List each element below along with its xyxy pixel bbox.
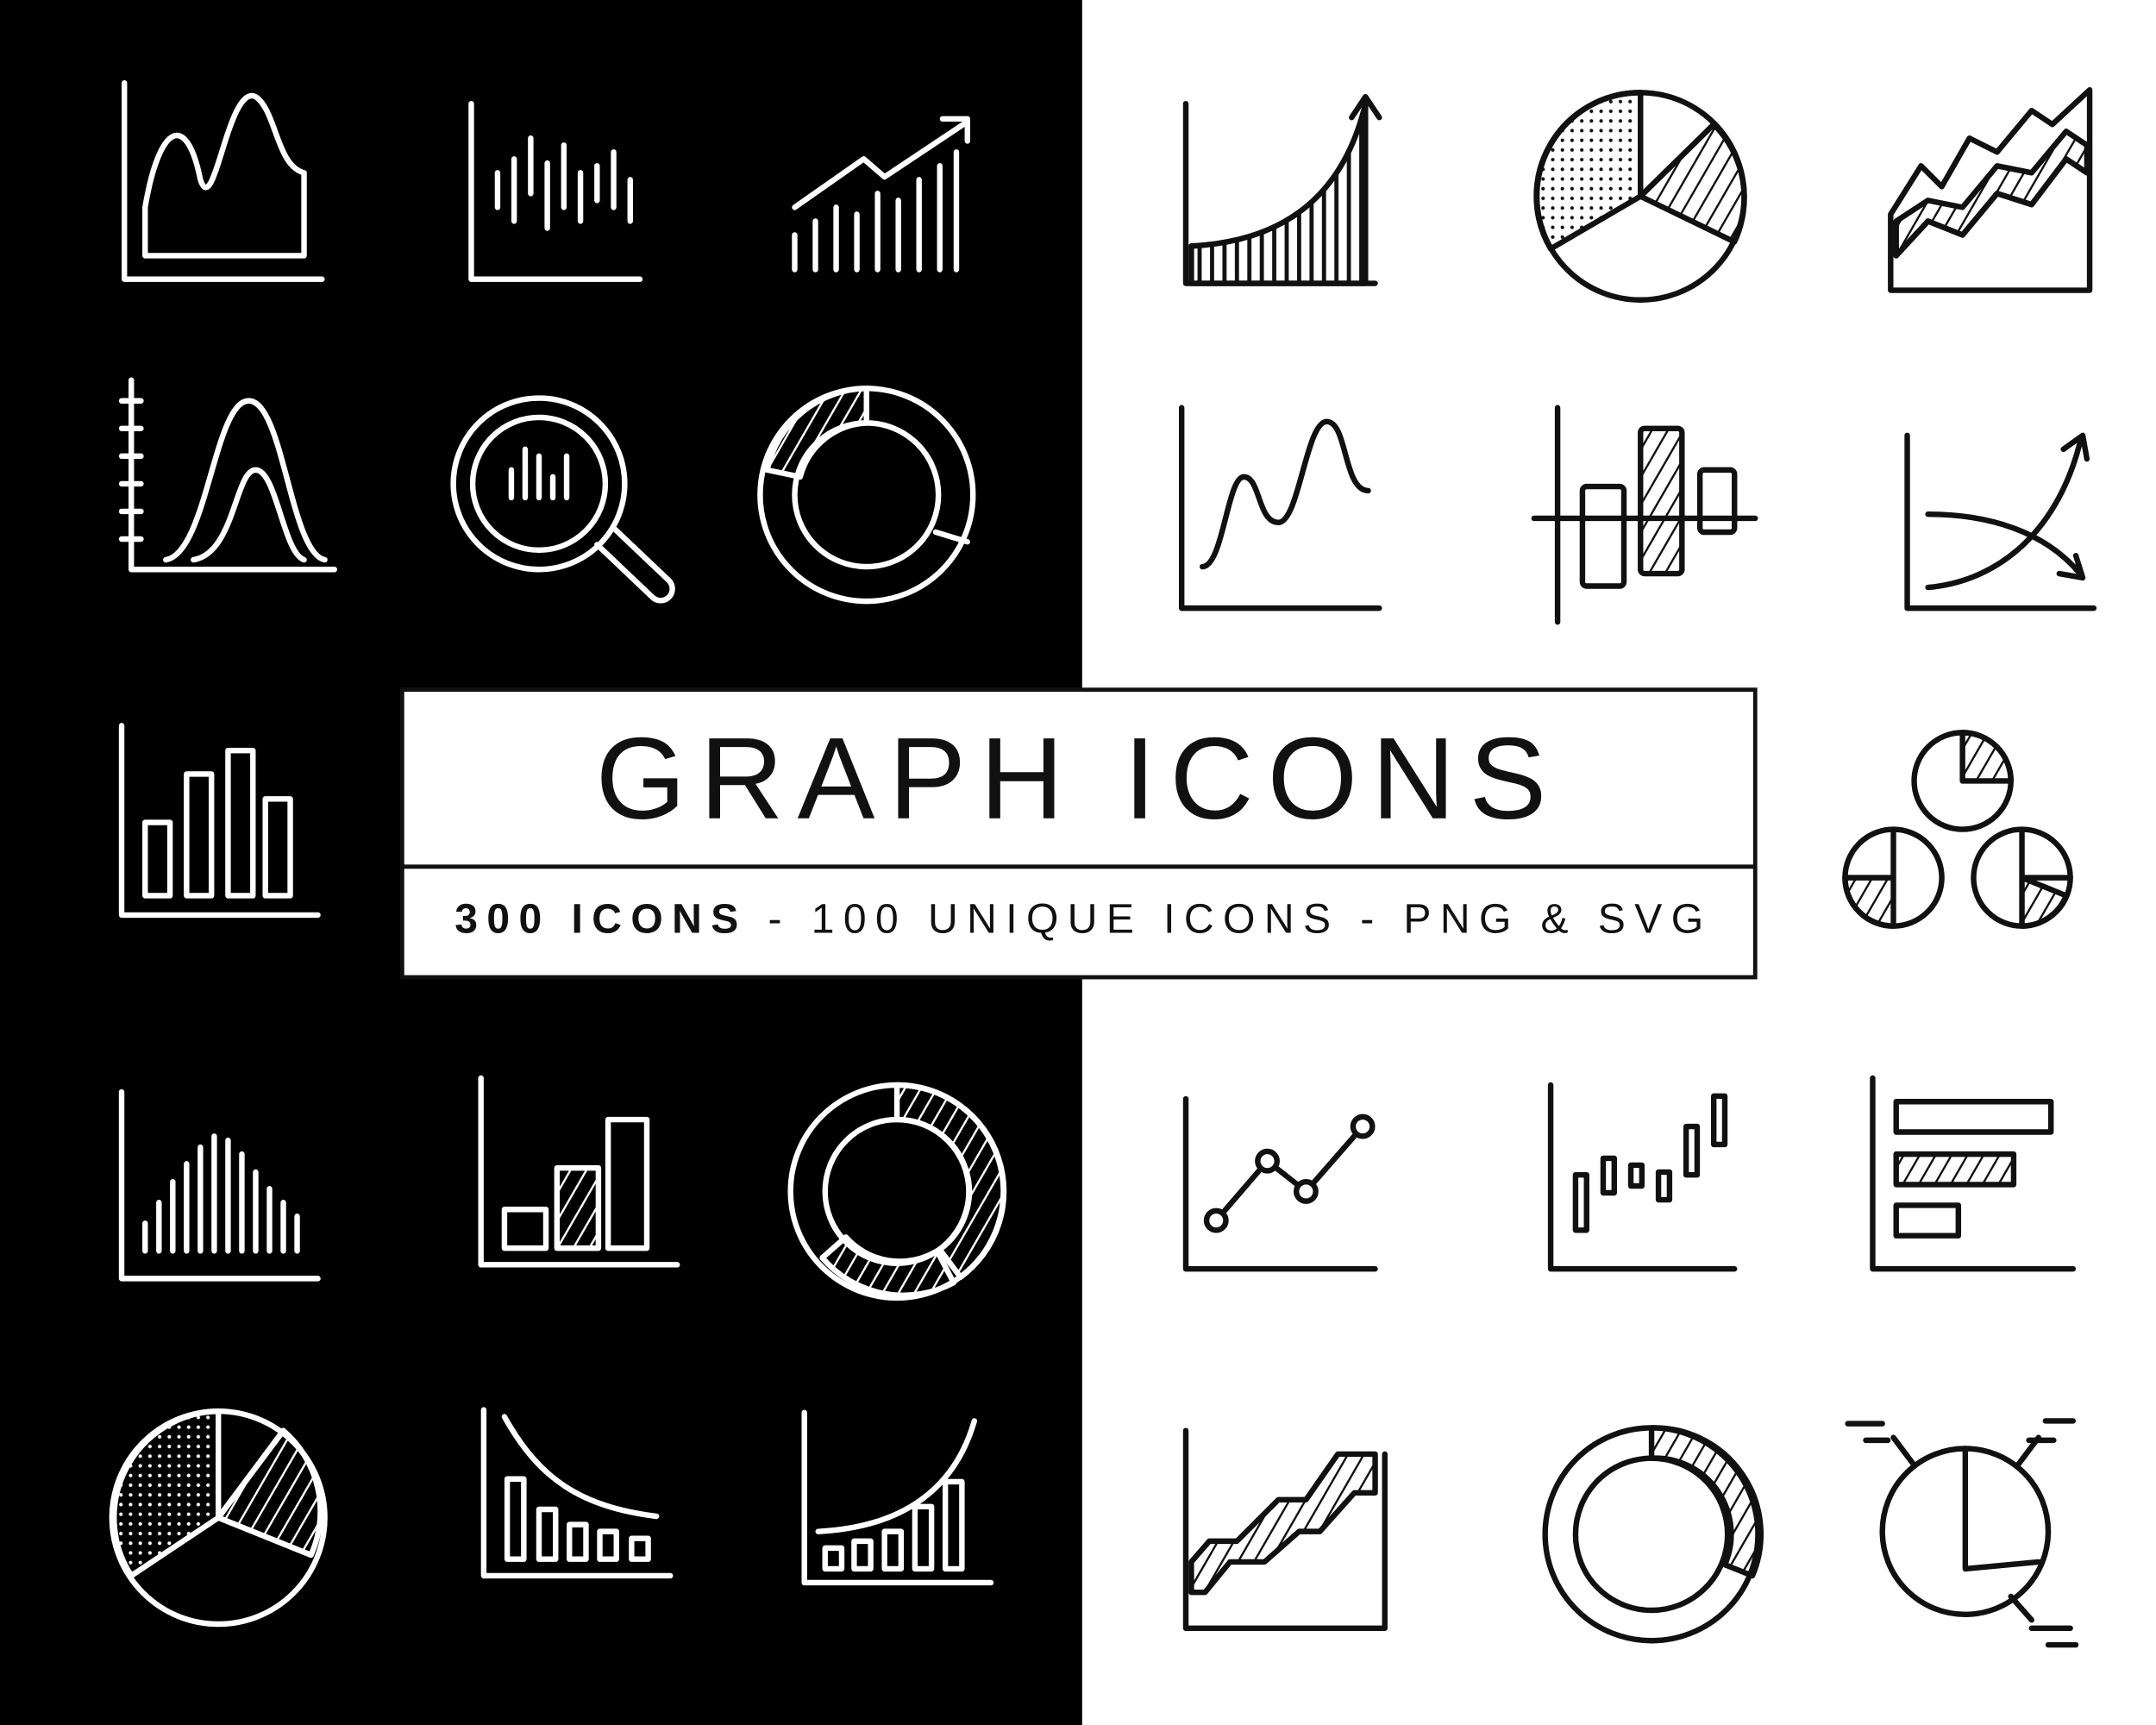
icon: bar chart outlined xyxy=(122,725,318,915)
icon: exponential hatched curve xyxy=(1186,97,1379,284)
icon: increasing bars curve xyxy=(805,1413,991,1583)
icon: bar chart hatched xyxy=(481,1078,677,1264)
icon: pie chart dots hatch xyxy=(1537,92,1745,300)
icon: vertical bar ticks xyxy=(471,104,640,279)
icon: pie chart white xyxy=(112,1411,325,1624)
icon: histogram xyxy=(122,1092,318,1278)
icon: donut hatched ring xyxy=(791,1085,1004,1298)
subtitle: 300 ICONS - 100 UNIQUE ICONS - PNG & SVG xyxy=(454,896,1713,943)
icon: wave line xyxy=(1181,408,1379,608)
title: GRAPH ICONS xyxy=(596,713,1560,844)
icon: box plot xyxy=(1534,408,1755,622)
icon: candles xyxy=(1551,1085,1734,1269)
icon: bell curves xyxy=(122,380,335,569)
icon: crossing curves xyxy=(1908,436,2094,608)
icon: step area hatched xyxy=(1186,1431,1385,1628)
icon: three pies xyxy=(1845,732,2071,926)
icon: magnifier with bars xyxy=(454,398,673,600)
icon: donut hatched xyxy=(760,388,973,601)
icon: trend arrow with bars xyxy=(794,119,968,269)
icon: mountain area chart xyxy=(1890,90,2090,291)
icon: line with dots xyxy=(1186,1099,1376,1269)
icon: horizontal bars xyxy=(1872,1078,2073,1269)
icon: area curve chart xyxy=(124,83,322,279)
title box xyxy=(402,690,1755,977)
icon: donut black xyxy=(1545,1427,1761,1640)
icon: pie with dashes xyxy=(1848,1421,2076,1645)
icon: decreasing bars curve xyxy=(484,1410,670,1576)
black left background xyxy=(0,0,1082,1725)
